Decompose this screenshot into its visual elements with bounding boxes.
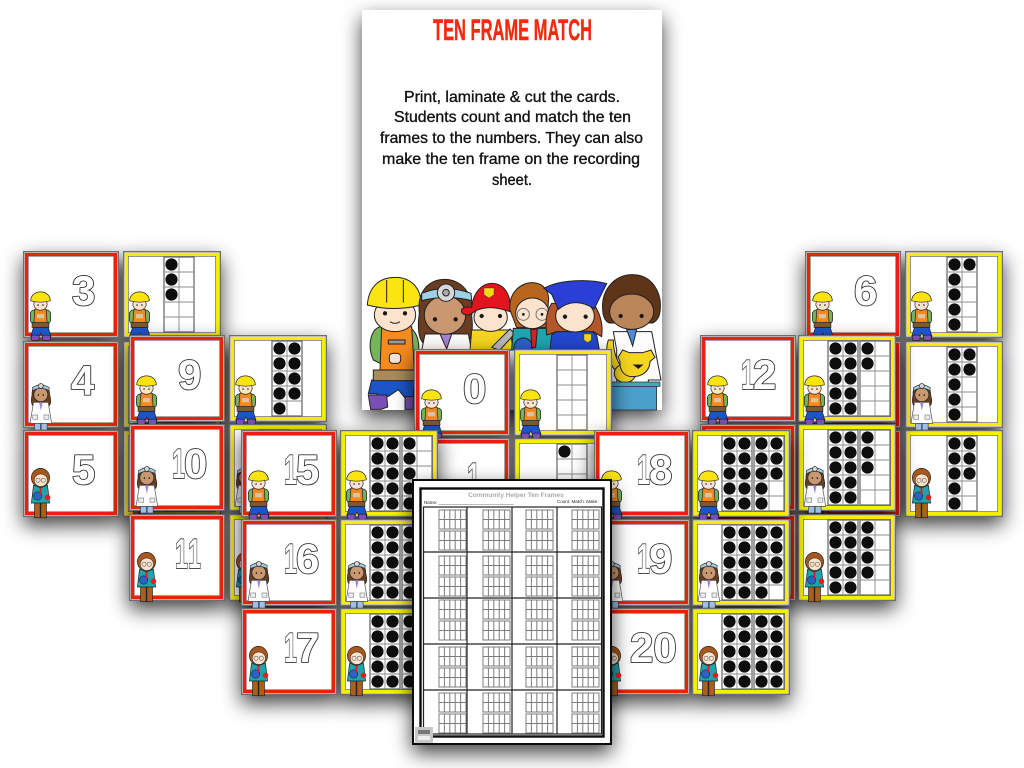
- number card 10: 1: [172, 440, 185, 487]
- number card 18: 8: [649, 446, 672, 493]
- yellow ten frame 5: [124, 431, 220, 518]
- number card 1: [415, 439, 509, 527]
- instructions text: [380, 89, 643, 189]
- number card 3: 3: [72, 267, 95, 314]
- sheet background: [362, 10, 662, 410]
- number card 17: 7: [296, 624, 319, 671]
- number card 13: [701, 425, 795, 513]
- number card 15: 5: [296, 446, 319, 493]
- number card 16: 1: [284, 535, 297, 582]
- number card 5: [24, 431, 118, 518]
- cards: third right column 18 19 20: [595, 431, 789, 696]
- number card 0: [415, 350, 509, 438]
- exam table: [612, 382, 660, 410]
- count match make: Count. Match. Make.: [557, 499, 599, 504]
- number card 12: 1: [741, 351, 754, 398]
- number card 13: 3: [753, 440, 776, 487]
- number card 7: 7: [854, 357, 877, 404]
- title: TEN FRAME MATCH: [433, 14, 592, 47]
- yellow ten frame 12: [799, 336, 895, 424]
- helper: construction worker: [367, 277, 421, 409]
- number card 9: [130, 336, 224, 424]
- helper: police officer: [544, 281, 607, 350]
- number card 4: [24, 342, 118, 430]
- helper: veterinarian: [603, 275, 661, 383]
- cards: third left column 15 16 17: [242, 431, 437, 696]
- number card 20: 20: [630, 624, 677, 671]
- number card 0: 0: [463, 365, 486, 412]
- number card 9: 9: [178, 351, 201, 398]
- number card 10: [130, 425, 224, 513]
- yellow ten frame 13: [799, 425, 895, 513]
- number card 16: [242, 520, 336, 608]
- cards: second left column 9 10 11: [130, 336, 326, 602]
- panel: instruction sheet: [362, 10, 662, 410]
- sheet border: [420, 488, 604, 736]
- number card 18: [595, 431, 689, 519]
- number card 4: 4: [71, 357, 95, 404]
- yellow ten frame 1: [515, 439, 611, 527]
- yellow ten frame 3: [124, 252, 220, 340]
- number card 14: 1: [741, 530, 754, 577]
- yellow ten frame 17: [341, 609, 437, 696]
- helper: firefighter: [461, 283, 515, 350]
- cards: centre column 0 1 2: [415, 350, 611, 527]
- name line: Name: ______________________________: [424, 500, 514, 505]
- number card 8: 8: [854, 446, 877, 493]
- number card 18: 1: [637, 446, 650, 493]
- yellow ten frame 10: [230, 425, 326, 513]
- yellow ten frame 18: [693, 431, 789, 519]
- panel: recording sheet: [413, 480, 611, 744]
- number card 15: 1: [284, 446, 297, 493]
- number card 12: 2: [753, 351, 776, 398]
- yellow ten frame 14: [799, 515, 895, 602]
- helper: doctor: [418, 279, 472, 351]
- number card 11: 1: [175, 530, 188, 577]
- number card 11: [130, 515, 224, 602]
- number card 16: 6: [296, 535, 319, 582]
- number card 6: 6: [854, 267, 877, 314]
- yellow ten frame 6: [906, 252, 1002, 340]
- number card 15: [242, 431, 336, 519]
- instructions text: Print, laminate & cut the cards.: [404, 89, 620, 106]
- instructions text: frames to the numbers. They can also: [380, 130, 643, 147]
- number card 3: [24, 252, 118, 340]
- number card 5: 5: [72, 446, 95, 493]
- logo: [415, 727, 433, 743]
- icon: yellow cat: [607, 340, 655, 383]
- yellow ten frame 19: [693, 520, 789, 608]
- number card 1: 1: [467, 454, 480, 501]
- number card 11: 1: [188, 530, 201, 577]
- number card 12: [701, 336, 795, 424]
- cards: far right column 6 7 8: [806, 252, 1002, 518]
- yellow ten frame 8: [906, 431, 1002, 518]
- yellow ten frame 11: [230, 515, 326, 602]
- number card 17: [242, 609, 336, 696]
- sheet paper: [413, 480, 611, 744]
- instructions text: make the ten frame on the recording: [382, 151, 640, 168]
- instructions text: sheet.: [492, 172, 532, 189]
- number card 17: 1: [284, 624, 297, 671]
- illustration: community helpers: [367, 275, 661, 410]
- number card 20: [595, 609, 689, 696]
- yellow ten frame 16: [341, 520, 437, 608]
- yellow ten frame 4: [124, 342, 220, 430]
- yellow ten frame 0: [515, 350, 611, 438]
- yellow ten frame 9: [230, 336, 326, 424]
- cards: second right column 12 13 14: [701, 336, 895, 602]
- number card 14: 4: [753, 530, 777, 577]
- recording table: [423, 507, 602, 734]
- number card 6: [806, 252, 900, 340]
- helper: scientist: [510, 283, 553, 357]
- number card 10: 0: [184, 440, 207, 487]
- yellow ten frame 7: [906, 342, 1002, 430]
- yellow ten frame 15: [341, 431, 437, 519]
- number card 19: [595, 520, 689, 608]
- sheet title: Community Helper Ten Frames: [468, 492, 564, 499]
- instructions text: Students count and match the ten: [394, 109, 631, 126]
- number card 19: 9: [649, 535, 672, 582]
- cards: left column 3 4 5: [24, 252, 220, 518]
- number card 7: [806, 342, 900, 430]
- number card 13: 1: [741, 440, 754, 487]
- yellow ten frame 20: [693, 609, 789, 696]
- number card 14: [701, 515, 795, 602]
- number card 8: [806, 431, 900, 518]
- number card 19: 1: [637, 535, 650, 582]
